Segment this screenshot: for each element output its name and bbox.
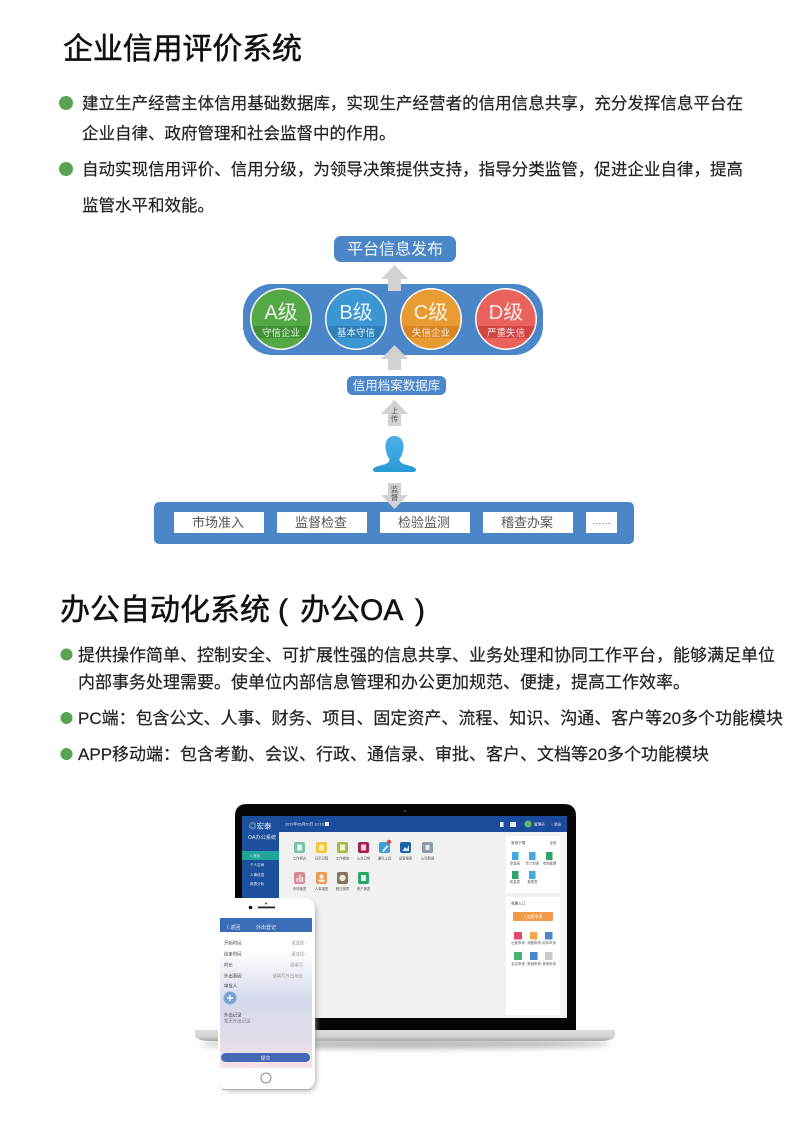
rating C: 失信企业 [412,327,450,339]
app icons: 工作督办 [293,856,307,860]
app icons: 人事报表 [315,886,329,891]
arrow: supervise [381,483,408,509]
credit archive database pill [347,376,446,395]
submit button [221,1053,310,1062]
home button [261,1073,271,1083]
right panel: quick entry: 出差申请 [511,940,525,945]
text block: office automation bullets [60,646,783,764]
credit archive database pill: 信用档案数据库 [353,378,440,393]
arrow: upload: 传 [391,414,399,424]
sidebar: 人事信息 [250,872,265,877]
right panel: quick entry: 用车申请 [542,940,556,945]
top bar: 管理员 [534,822,545,826]
right panel: recent files [506,836,560,893]
text block: credit system bullets: 企业自律、政府管理和社会监督中的作用。 [82,124,396,143]
phone form: 外出记录 [224,1012,242,1018]
heading: office automation system: 办公自动化系统 [60,594,270,627]
phone form: 请填写外出地点 [272,972,304,980]
rating B [325,288,387,350]
arrow: band to platform [381,265,408,291]
right panel: recent files: 常用下载 [511,840,526,845]
add button [224,992,236,1004]
icon: person [373,436,416,472]
sidebar: 个人空间 [250,862,265,867]
laptop base [195,1030,615,1041]
rating C [400,288,462,350]
box: market access: 市场准入 [192,515,244,530]
right panel: recent files: 考勤管理 [543,860,557,866]
phone form: 请选择 › [291,950,308,958]
top bar: 2019年05月20日 10:18:15 [285,822,329,826]
app icons [293,840,435,891]
arrow: upload [381,400,408,426]
box: supervision: 监督检查 [295,515,347,530]
sidebar: ◎宏泰 [249,820,272,830]
app icons: 公司新闻 [421,856,435,860]
screen [242,816,567,1018]
heading: office automation system: 办公 [300,594,360,627]
phone form: 外出事因 [224,972,242,980]
rating B: B级 [339,301,373,324]
right panel: recent files: 全部 [550,840,557,845]
box: supervision [277,512,367,533]
box: market access [174,512,264,533]
arrow: database to band [381,345,408,370]
rating A [250,288,312,350]
text block: office automation bullets: 内部事务处理需要。使单位内部信息管理和办公更加规范、便捷，提高工作效率。 [78,672,690,692]
sidebar [242,816,279,1018]
top bar: ○ 退出 [551,822,562,826]
device mockup: phone [218,898,317,1092]
rating A: 守信企业 [262,327,300,339]
inspection band [154,502,634,544]
phone form: 开始时间 [224,940,242,946]
right panel: quick entry: 报销申请 [527,961,541,966]
diagram: credit rating flow [154,236,634,544]
right panel: recent files: 奖金表 [510,879,521,884]
rating D: D级 [489,301,523,324]
text block: credit system bullets: 监管水平和效能。 [82,196,214,215]
box: inspection [380,512,470,533]
phone form: 结束时间 [224,950,242,958]
app icons: 公文日常 [357,856,371,860]
phone form: 暂无外出记录 [224,1018,251,1024]
phone form: 审批人 [224,982,238,990]
phone form: 请选择 › [291,940,308,946]
text block: office automation bullets: 提供操作简单、控制安全、可扩展性强的信息共享、业务处理和协同工作平台，能够满足单位 [78,646,775,665]
text block: credit system bullets: 自动实现信用评价、信用分级，为领导决策提供支持，指导分类监管，促进企业自律，提高 [82,160,743,179]
arrow: supervise: 监 [391,484,399,494]
heading: credit evaluation system: 企业信用评价系统 [63,33,302,66]
right panel: recent files: 报表表 [527,879,538,884]
app icons: 运营报表 [399,856,413,860]
app icons: 资产报表 [357,886,371,891]
right panel: recent files: 年计划表 [526,860,540,866]
app icons: 工作微信 [336,856,350,860]
arrow: supervise: 督 [391,492,399,502]
right panel: quick entry: + 加班申请 [524,914,542,919]
right panel: recent files: 奖金表 [510,860,521,866]
text block: office automation bullets: PC端：包含公文、人事、财务、项目、固定资产、流程、知识、沟通、客户等20多个功能模块 [78,709,783,728]
rating C: C级 [414,301,448,324]
device mockup: laptop [195,804,615,1049]
text block: credit system bullets [59,94,743,215]
platform publishing pill [334,236,456,262]
phone header: 〈 返回 [224,924,240,931]
heading: office automation system: ( [278,594,288,627]
app icons: 假日报表 [336,886,350,891]
app icons: 日历日程 [315,856,329,860]
box: more: …… [592,516,610,526]
phone header: 外出登记 [256,924,276,931]
top bar [242,816,567,832]
laptop lid [235,804,576,1030]
phone form: 时长 [224,962,233,968]
box: more [586,512,617,533]
app icons: 市场报表 [293,886,307,891]
heading: office automation system: ) [415,594,425,627]
box: case handling: 稽查办案 [501,515,553,530]
platform publishing pill: 平台信息发布 [347,240,443,258]
phone form: 请填写 [290,962,304,968]
right panel: quick entry: 我要入口 [511,900,526,906]
app icons: 通讯工具 [378,856,392,860]
rating D: 严重失信 [487,327,525,339]
submit button: 提交 [261,1054,270,1062]
box: case handling [483,512,573,533]
sidebar: OA办公系统 [248,833,276,841]
text block: office automation bullets: APP移动端：包含考勤、会议、行政、通信录、审批、客户、文档等20多个功能模块 [78,745,709,764]
arrow: upload: 上 [391,406,399,416]
rating band [243,284,543,355]
right panel: quick entry: 会议申请 [511,961,525,966]
phone form [224,940,308,1024]
rating A: A级 [264,301,298,324]
sidebar: ⌂ 首页 [250,853,261,858]
box: inspection: 检验监测 [398,515,450,530]
text block: credit system bullets: 建立生产经营主体信用基础数据库，实现生产经营者的信用信息共享，充分发挥信息平台在 [82,94,743,113]
right panel: quick entry: 请假申请 [527,940,541,945]
rating D [475,288,537,350]
rating B: 基本守信 [337,327,375,339]
phone screen [220,918,312,1068]
right panel: quick entry [506,897,560,1015]
heading: office automation system: OA [360,594,403,627]
sidebar: 报表分析 [250,881,265,886]
right panel: quick entry: 其他申请 [542,961,556,966]
phone header [220,918,312,932]
